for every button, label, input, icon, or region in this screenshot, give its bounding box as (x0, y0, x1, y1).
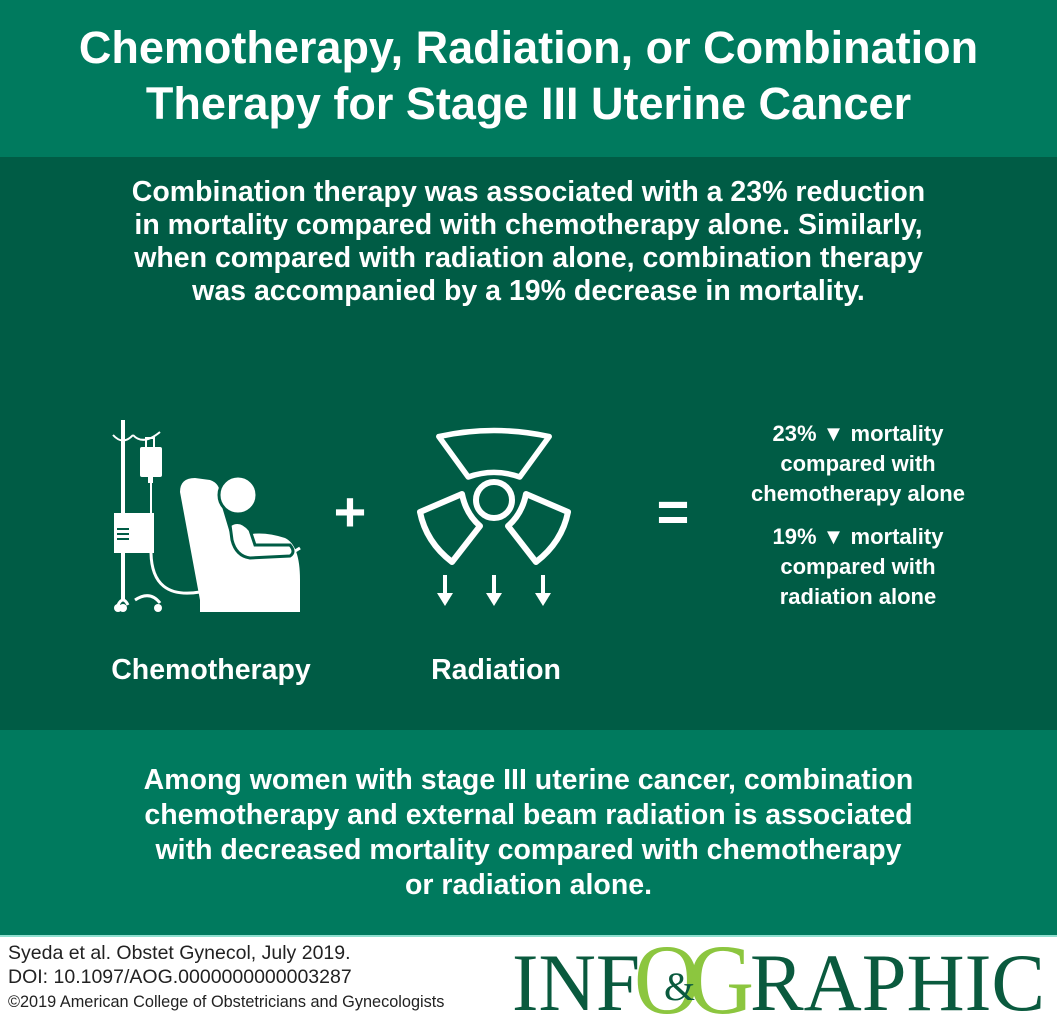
results text: radiation alone (780, 584, 936, 609)
logo: INF (512, 938, 640, 1028)
summary text: was accompanied by a 19% decrease in mortality. (192, 275, 865, 307)
conclusion text: chemotherapy and external beam radiation is associated (144, 799, 913, 831)
icon: equals: = (657, 480, 689, 543)
citation: DOI: 10.1097/AOG.0000000000003287 (8, 966, 352, 988)
panel: main findings (0, 157, 1057, 730)
logo: RAPHIC (750, 938, 1045, 1028)
icon: plus: + (334, 480, 366, 543)
conclusion text: Among women with stage III uterine cancer, combination (144, 764, 913, 796)
icon: radiation (417, 428, 571, 606)
summary text (132, 176, 925, 307)
summary text: when compared with radiation alone, combination therapy (134, 242, 923, 274)
label: radiation: Radiation (431, 654, 561, 686)
results text: compared with (780, 554, 936, 579)
logo (512, 938, 1045, 1030)
citation (8, 942, 444, 1011)
title (79, 22, 978, 129)
icon: chemotherapy (112, 420, 301, 612)
logo: & (664, 964, 695, 1009)
summary text: Combination therapy was associated with a 23% reduction (132, 176, 925, 208)
title: Chemotherapy, Radiation, or Combination (79, 22, 978, 73)
citation: ©2019 American College of Obstetricians and Gynecologists (8, 993, 444, 1011)
citation: Syeda et al. Obstet Gynecol, July 2019. (8, 942, 351, 964)
label: chemotherapy: Chemotherapy (111, 654, 311, 686)
conclusion text (144, 764, 913, 901)
title: Therapy for Stage III Uterine Cancer (146, 78, 911, 129)
results text: 23% ▼ mortality (773, 421, 943, 446)
conclusion text: or radiation alone. (405, 869, 652, 901)
panel: conclusion (0, 730, 1057, 935)
results text: chemotherapy alone 19% ▼ mortality (751, 481, 965, 549)
summary text: in mortality compared with chemotherapy alone. Similarly, (134, 209, 923, 241)
conclusion text: with decreased mortality compared with chemotherapy (156, 834, 901, 866)
title band (0, 0, 1057, 157)
results text: compared with (780, 451, 936, 476)
results text (751, 421, 965, 609)
